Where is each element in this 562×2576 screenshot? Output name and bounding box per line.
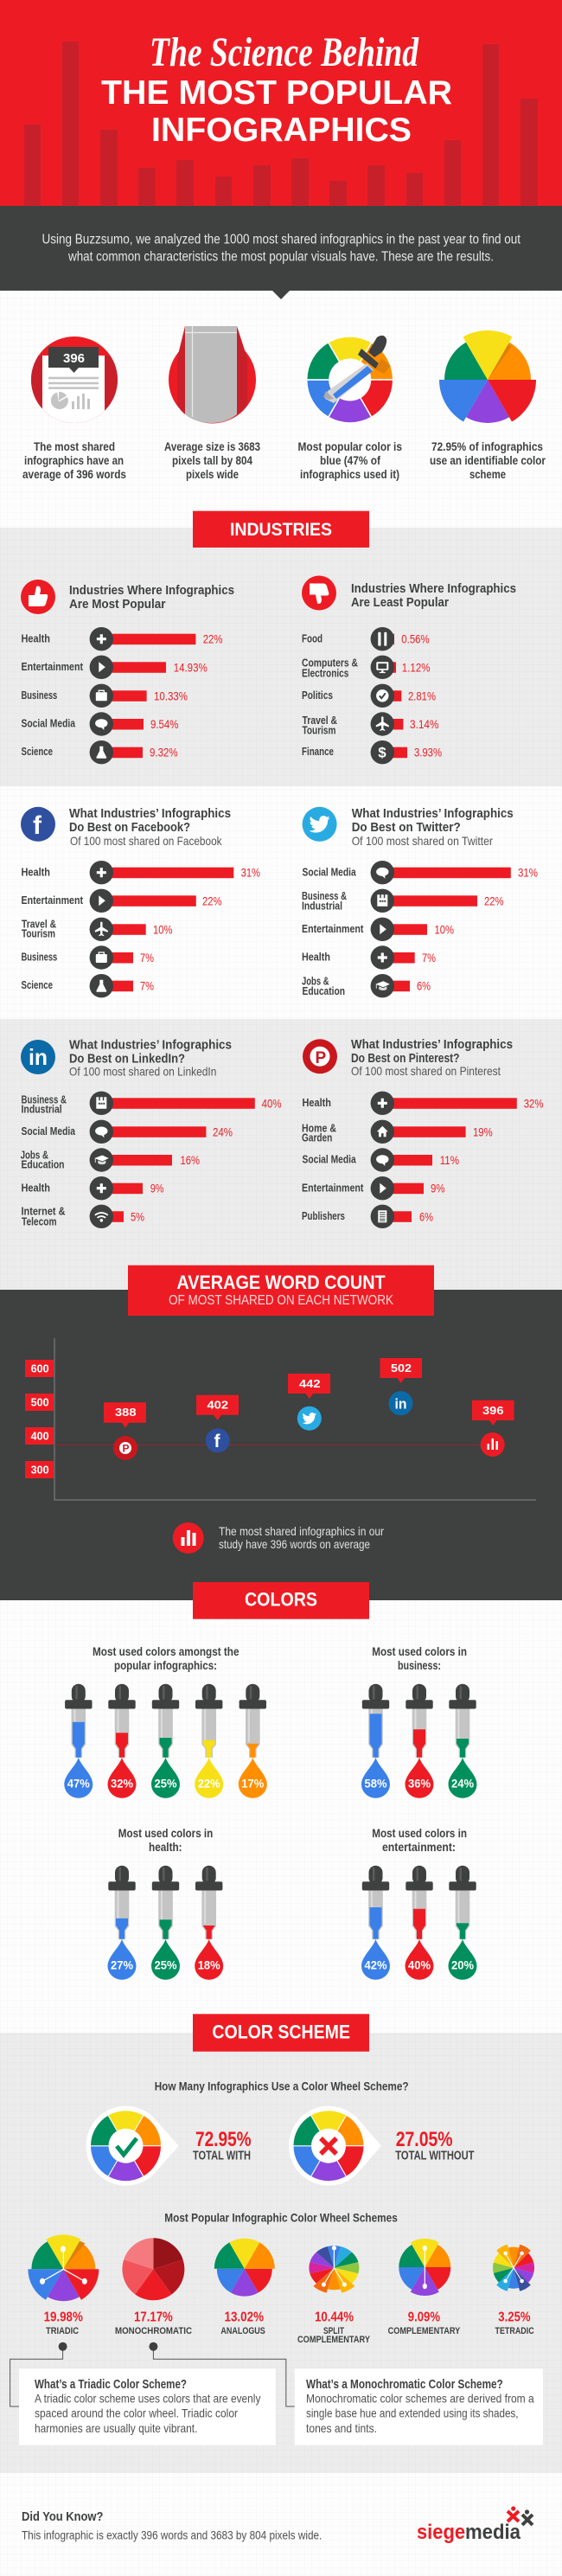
banner: average word count: AVERAGE WORD COUNT [176,1272,386,1293]
point: average 396 [472,1400,514,1457]
dropper: red 40% [405,1866,434,1980]
banner: colors: COLORS [245,1589,317,1611]
row: health: 9% [150,1182,164,1195]
point: pinterest 388: P [123,1443,130,1455]
panel: linkedin [21,1038,281,1228]
dropper: green 20% [448,1866,477,1980]
icon: facebook [21,807,55,842]
y axis labels [25,1360,54,1478]
row: entertainment: Entertainment [21,894,84,907]
dropper: yellow 22% [195,1684,223,1798]
intro text [42,233,521,265]
row: business and industrial [302,889,503,913]
scheme: analogous: ANALOGUS [220,2326,265,2336]
y axis labels: 500 [31,1396,49,1408]
row: social media: Social Media [21,718,76,730]
banner: colors [193,1582,369,1619]
dropper: blue 27% [107,1866,137,1980]
heading: Most used colors in [118,1826,213,1840]
heading: Most used colors in [372,1644,467,1658]
scheme: monochromatic: 17.17% [134,2310,173,2324]
callout: monochromatic: single base hue and extended using its shades, [306,2406,519,2420]
intro text: what common characteristics the most popular visuals have. These are the results. [67,250,494,265]
row: finance: 3.93% [414,746,442,759]
stat: most popular color [297,336,402,481]
row: social media [303,861,538,884]
dropper: red 18%: 18% [198,1958,220,1972]
row: entertainment: Entertainment [302,1182,364,1194]
title: The Science Behind [150,29,419,75]
scheme: tetradic: TETRADIC [495,2326,534,2336]
panel: intro [0,206,562,299]
dropper: green 25%: 25% [154,1958,177,1972]
point: facebook 402 [196,1395,239,1452]
callout: triadic: spaced around the color wheel. Triadic color [35,2406,238,2420]
row: politics: Politics [302,689,333,702]
row: health [302,945,436,970]
row: entertainment: Entertainment [302,923,364,935]
footer note: Did You Know? [22,2509,103,2524]
heading: Do Best on Pinterest? [351,1051,460,1066]
row: business and industrial [21,1092,282,1116]
footer note: This infographic is exactly 396 words and 3683 by 804 pixels wide. [22,2528,322,2542]
heading: What Industries’ Infographics [69,1038,232,1053]
scheme: split complementary: 10.44% [315,2310,354,2324]
row: computers: Computers & [302,657,358,670]
icon: facebook: f [33,811,42,840]
heading: What Industries’ Infographics [352,806,514,821]
row: social media: Social Media [21,1125,76,1137]
point: twitter 442 [288,1374,330,1431]
panel: most used colors [64,1644,477,1980]
row: jobs and education [21,1148,200,1172]
row: business: Business [21,689,57,702]
scheme: complementary [388,2239,461,2336]
row: publishers: 6% [419,1209,433,1223]
legend: study have 396 words on average [219,1537,370,1551]
heading [351,581,516,610]
heading: What Industries’ Infographics [69,806,231,821]
row: jobs and education: 16% [180,1153,200,1167]
dropper: red 32%: 32% [111,1777,134,1791]
row: science [21,740,178,764]
row: science: Science [21,979,53,991]
heading: Of 100 most shared on Facebook [70,834,222,848]
stat: average words: average of 396 words [22,467,126,481]
row: entertainment: 22% [202,894,222,907]
stat: average words [22,336,126,481]
point: linkedin 502 [380,1358,422,1415]
row: business and industrial: Industrial [21,1104,62,1116]
wheel: total without [289,2106,475,2186]
connector: monochromatic [149,2342,295,2406]
heading [69,806,231,848]
heading [351,1037,513,1078]
row: entertainment [302,918,454,941]
dropper: red 40%: 40% [408,1958,431,1972]
row: travel: Travel & [303,714,337,727]
row: business and industrial: Business & [302,890,347,902]
heading: Are Least Popular [351,595,449,610]
row: social media: 24% [213,1125,233,1138]
panel: popular schemes [28,2211,534,2345]
row: food: 0.56% [401,632,430,646]
row: publishers: Publishers [302,1210,345,1222]
callout: monochromatic [295,2368,543,2445]
stat: average size: Average size is 3683 [164,439,260,453]
row: social media: 31% [518,866,538,880]
row: social media [21,712,178,736]
row: health: 32% [524,1096,543,1110]
heading: Do Best on LinkedIn? [69,1052,185,1067]
row: business: 7% [140,951,154,964]
panel: facebook [21,806,260,997]
row: finance: Finance [302,746,334,758]
row: business and industrial: 22% [484,894,503,907]
row: home and garden: Home & [302,1122,336,1134]
row: internet and telecom: 5% [131,1209,144,1223]
stat: average size: pixels wide [186,467,239,481]
dropper: blue 42% [361,1866,390,1980]
row: entertainment [302,1176,444,1200]
scheme: complementary: 9.09% [408,2310,440,2324]
icon: pinterest: P [315,1049,327,1067]
dropper: blue 27%: 27% [111,1958,134,1972]
title [101,29,452,149]
point: average 396: 396 [482,1404,503,1417]
point: linkedin 502: in [394,1396,406,1412]
heading: health: [149,1840,182,1854]
point: pinterest 388 [104,1402,146,1460]
row: social media [21,1120,233,1144]
row: entertainment: 10% [434,922,454,936]
dropper: blue 47%: 47% [67,1777,90,1791]
row: entertainment: 9% [431,1182,444,1195]
title: INFOGRAPHICS [151,112,412,149]
scheme: triadic [28,2234,99,2336]
row: jobs and education: Education [21,1159,64,1171]
scheme: complementary: COMPLEMENTARY [388,2326,461,2336]
row: social media: 11% [440,1153,459,1167]
row: business [21,945,154,970]
row: jobs and education: Jobs & [302,976,329,988]
heading [69,583,234,612]
stat: average words: 396 [63,352,85,366]
scheme: triadic: TRIADIC [46,2326,79,2336]
dropper: red 18% [195,1866,223,1980]
dropper: green 24% [448,1684,477,1798]
row: health [21,627,223,650]
row: travel [22,918,172,941]
banner: color scheme [193,2014,369,2052]
row: finance: $ [378,745,386,761]
point: linkedin 502: 502 [391,1362,412,1375]
title: THE MOST POPULAR [101,74,452,112]
icon: twitter [303,807,337,842]
point: pinterest 388: 388 [115,1406,137,1419]
row: health: 22% [203,632,223,646]
dropper: green 20%: 20% [451,1958,475,1972]
row: finance [302,740,442,764]
row: social media: Social Media [303,1154,357,1166]
icon: thumbs up [21,580,55,614]
legend [173,1522,384,1554]
heading [352,806,514,848]
heading: Most used colors amongst the [93,1644,239,1658]
scheme: split complementary [297,2246,371,2345]
dropper: green 25%: 25% [154,1777,177,1791]
row: jobs and education: 6% [417,979,431,993]
row: health: Health [21,1182,50,1194]
wheel: total without: 27.05% [396,2128,453,2151]
heading [118,1826,213,1854]
heading: Most used colors in [372,1826,467,1840]
heading: Do Best on Twitter? [352,820,461,835]
row: health [21,1176,164,1200]
icon: linkedin: in [29,1044,48,1070]
stat: color scheme: 72.95% of infographics [431,439,543,453]
dropper: orange 17% [239,1684,267,1798]
row: social media: Social Media [303,866,357,878]
row: health [21,861,260,884]
row: entertainment: 14.93% [174,660,208,674]
row: science: Science [21,746,53,758]
row: health [303,1092,543,1115]
logo: siegemedia [417,2506,533,2544]
scheme: triadic: 19.98% [44,2310,83,2324]
heading [372,1826,467,1854]
dropper: yellow 22%: 22% [198,1777,220,1791]
callout: monochromatic: What’s a Monochromatic Color Scheme? [306,2378,503,2392]
heading: Of 100 most shared on LinkedIn [69,1064,216,1078]
row: internet and telecom: Telecom [22,1215,57,1227]
dropper: green 24%: 24% [451,1777,475,1791]
row: travel: Tourism [22,928,55,940]
row: entertainment: Entertainment [21,661,84,673]
dropper: orange 17%: 17% [241,1777,265,1791]
row: social media: 9.54% [150,717,178,731]
row: jobs and education: Jobs & [21,1149,48,1161]
row: computers [302,656,431,679]
dropper: blue 47% [64,1684,93,1798]
row: science: 9.32% [150,746,178,759]
header background bars [24,42,538,206]
heading: popular infographics: [114,1658,217,1672]
point: facebook 402: f [214,1432,221,1451]
stat: most popular color: Most popular color is [297,439,402,453]
heading [69,1038,232,1078]
scheme: tetradic: 3.25% [498,2310,531,2324]
callout: triadic [19,2368,276,2445]
heading: Of 100 most shared on Twitter [352,834,493,848]
banner: industries [193,511,369,548]
heading: How Many Infographics Use a Color Wheel Scheme? [155,2079,409,2093]
row: food [302,627,430,650]
heading: Most Popular Infographic Color Wheel Schemes [164,2211,398,2225]
point: twitter 442: 442 [299,1377,320,1390]
dropper: blue 58% [361,1684,390,1798]
row: politics: 2.81% [408,689,436,702]
wheel: total with [86,2106,252,2186]
row: home and garden: 19% [473,1125,493,1138]
logo: siegemedia: media [465,2521,521,2544]
connector: triadic [10,2342,67,2406]
y axis labels: 400 [31,1429,49,1443]
scheme: split complementary: SPLIT [323,2326,344,2336]
dropper: blue 42%: 42% [365,1958,387,1972]
banner: color scheme: COLOR SCHEME [212,2022,350,2043]
dropper: red 36%: 36% [408,1777,431,1791]
dropper: green 25% [151,1866,180,1980]
row: health: Health [21,632,50,644]
stat: most popular color: blue (47% of [320,453,380,467]
callout: triadic: harmonies are usually quite vibrant. [35,2421,197,2435]
row: home and garden: Garden [302,1132,332,1144]
row: business and industrial: Industrial [302,900,342,912]
row: health: Health [302,952,330,964]
row: travel: 3.14% [410,717,439,731]
heading: entertainment: [382,1840,456,1854]
row: business [21,684,188,708]
wheel: total with: TOTAL WITH [193,2150,251,2163]
stat: color scheme [430,330,546,481]
heading [93,1644,239,1672]
scheme: analogous [214,2239,275,2336]
callout: triadic: A triadic color scheme uses colors that are evenly [35,2391,260,2405]
row: computers: Electronics [302,667,348,679]
wheel: total with: 72.95% [195,2128,252,2151]
row: internet and telecom: Internet & [21,1206,66,1218]
panel: header [0,0,562,206]
heading: Do Best on Facebook? [69,820,190,835]
panel: most popular industries [21,580,234,764]
row: home and garden [302,1120,493,1144]
dropper: red 32% [107,1684,137,1798]
scheme: split complementary: COMPLEMENTARY [297,2335,371,2345]
row: health: Health [21,866,50,878]
footer note [22,2509,322,2542]
heading: What Industries’ Infographics [351,1037,513,1052]
row: business: 10.33% [154,689,188,702]
row: business and industrial: Business & [21,1093,67,1105]
callout: triadic: What’s a Triadic Color Scheme? [35,2378,187,2392]
row: health: 31% [241,866,260,880]
row: computers: 1.12% [402,660,431,674]
row: jobs and education: Education [303,985,345,997]
row: travel: 10% [153,922,172,936]
heading: Industries Where Infographics [351,581,516,596]
row: science: 7% [140,979,154,993]
legend: The most shared infographics in our [219,1524,384,1538]
row: entertainment [21,656,208,679]
banner: average word count: OF MOST SHARED ON EACH NETWORK [169,1293,393,1308]
row: health: 7% [422,951,436,964]
heading [372,1644,467,1672]
y axis labels: 300 [31,1464,49,1476]
stat: average words: infographics have an [24,453,124,467]
logo: siegemedia: siege [417,2521,465,2544]
icon: thumbs down [302,576,336,611]
heading: Are Most Popular [69,597,166,612]
dropper: green 25% [151,1684,180,1798]
row: travel: Travel & [22,918,56,930]
stat: average words: The most shared [34,439,115,453]
row: health: Health [303,1097,331,1109]
row: internet and telecom [21,1205,144,1228]
dropper: red 36% [405,1684,434,1798]
icon: linkedin [21,1040,55,1074]
banner: average word count [128,1266,434,1316]
row: travel [303,712,439,736]
row: travel: Tourism [303,724,335,736]
y axis labels: 600 [31,1362,49,1375]
heading: Of 100 most shared on Pinterest [351,1064,501,1078]
row: politics [302,684,436,708]
row: business and industrial: 40% [262,1096,282,1110]
heading: business: [398,1658,441,1672]
row: social media [303,1148,459,1172]
icon: dropper [323,336,391,403]
row: jobs and education [302,974,431,997]
row: entertainment [21,889,222,913]
callout: monochromatic: tones and tints. [306,2421,377,2435]
panel: color wheel usage [86,2079,475,2186]
scheme: monochromatic: MONOCHROMATIC [115,2326,192,2336]
scheme: monochromatic [115,2238,192,2336]
panel: twitter [302,806,538,997]
panel: least popular industries [302,576,516,764]
scheme: tetradic [493,2245,534,2336]
banner: industries: INDUSTRIES [230,520,332,540]
stat: color scheme: scheme [469,467,506,481]
wheel: total without: TOTAL WITHOUT [395,2150,475,2163]
row: science [21,974,154,997]
chart: word count by network [25,1338,536,1500]
stat: average size [164,326,260,481]
row: business: Business [21,952,57,964]
row: publishers [302,1205,433,1228]
panel: pinterest [302,1037,543,1228]
panel: key stats [22,326,546,481]
panel: average word count [0,1266,562,1600]
heading: Industries Where Infographics [69,583,234,598]
point: facebook 402: 402 [208,1398,228,1412]
stat: average size: pixels tall by 804 [172,453,252,467]
row: food: Food [302,632,323,644]
stat: most popular color: infographics used it) [300,467,399,481]
scheme: analogous: 13.02% [225,2310,264,2324]
icon: pinterest [303,1039,337,1073]
dropper: blue 58%: 58% [365,1777,387,1791]
